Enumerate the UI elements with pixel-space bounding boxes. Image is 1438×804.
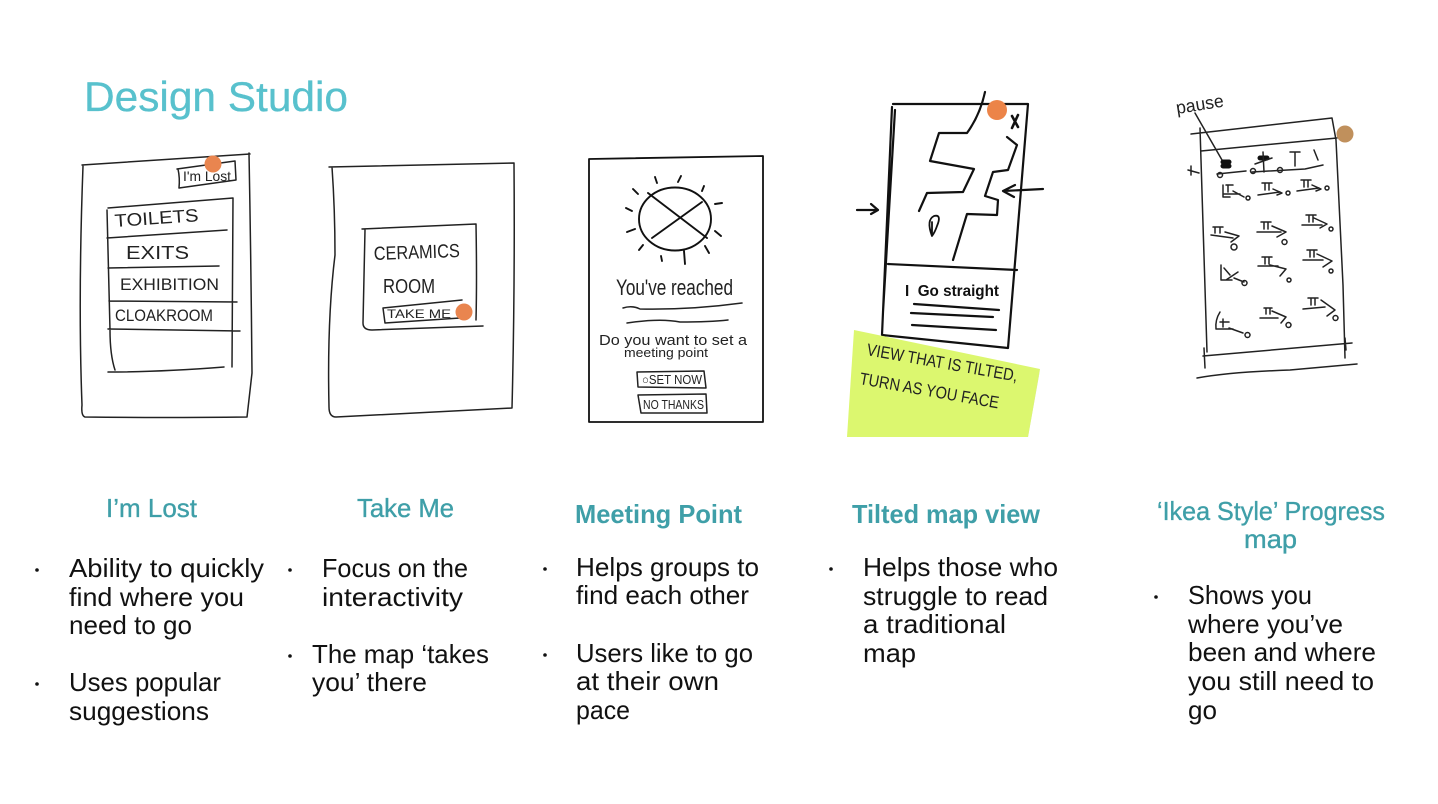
button: I'm Lost — [177, 161, 236, 188]
bullets: Take Me: The map ‘takes — [312, 639, 489, 669]
bullets: Ikea Style Progress map: where you’ve — [1187, 609, 1343, 639]
bullets: Meeting Point: pace — [576, 695, 630, 725]
button: No Thanks — [638, 394, 707, 413]
list: suggestions menu: CLOAKROOM — [115, 306, 213, 325]
bullets: Take Me: you’ there — [312, 667, 427, 697]
sketch: Tilted map view wireframe — [857, 92, 1043, 348]
sketch: Meeting Point wireframe — [589, 156, 763, 422]
bullets: Tilted map view — [829, 552, 1058, 668]
bullets: I'm Lost: Uses popular — [69, 667, 221, 697]
bullets: Ikea Style Progress map: been and where — [1188, 637, 1376, 667]
sticky note — [847, 330, 1040, 437]
text: set a meeting point prompt — [599, 332, 748, 360]
sticky note: VIEW THAT IS TILTED, — [865, 340, 1019, 386]
column: Take Me — [288, 493, 489, 697]
heading: Tilted map view: Tilted map view — [852, 499, 1041, 529]
bullets: Take Me: Focus on the — [322, 553, 468, 583]
card: Ceramics Room — [362, 224, 483, 330]
marker: orange dot — [987, 100, 1007, 120]
bullets: Ikea Style Progress map: you still need to — [1188, 666, 1374, 696]
bullets: Tilted map view: Helps those who — [863, 552, 1058, 582]
bullets: Meeting Point: at their own — [576, 666, 719, 696]
marker: close x — [1012, 115, 1018, 128]
text: You've reached: You've reached — [616, 275, 733, 300]
heading: Meeting Point: Meeting Point — [575, 499, 742, 529]
bullets: Meeting Point — [543, 552, 759, 725]
marker: faded orange dot — [1336, 126, 1354, 142]
map: route lines — [919, 92, 1017, 260]
arrow: left pointer — [857, 204, 878, 214]
sketch: Ikea Style progress wireframe — [1174, 91, 1357, 378]
bullets: Take Me: interactivity — [322, 582, 463, 612]
column: Ikea Style Progress map — [1154, 496, 1385, 725]
bullets: Ikea Style Progress map: Shows you — [1188, 580, 1312, 610]
column: I'm Lost — [35, 493, 264, 726]
bullets: I'm Lost — [35, 553, 264, 726]
marker: orange dot — [204, 156, 222, 172]
button: Set Now: ○SET NOW — [642, 373, 702, 387]
bullets: Ikea Style Progress map — [1154, 580, 1376, 725]
icon: sun with crossed circle — [626, 176, 722, 264]
heading: Take Me: Take Me — [357, 493, 454, 523]
text: Go straight: I Go straight — [905, 283, 1000, 300]
icon: map pin — [929, 216, 939, 236]
list: suggestions menu: TOILETS — [114, 205, 199, 231]
list: suggestions menu — [107, 198, 240, 372]
marker: orange dot — [456, 304, 472, 320]
button: Take Me — [383, 300, 462, 323]
list: suggestions menu: EXHIBITION — [120, 275, 219, 294]
sketch: Take Me wireframe — [329, 163, 514, 417]
card: Ceramics Room: ROOM — [383, 276, 435, 298]
bullets: Tilted map view: struggle to read — [863, 581, 1048, 611]
button: No Thanks: NO THANKS — [643, 398, 704, 412]
sketch: I'm Lost wireframe — [80, 153, 252, 418]
text: pause: pause — [1174, 91, 1225, 118]
sticky note: TURN AS YOU FACE — [858, 369, 1000, 412]
card: Ceramics Room: CERAMICS — [373, 241, 460, 265]
heading: I'm Lost: I’m Lost — [106, 493, 198, 523]
bullets: Meeting Point: Users like to go — [576, 638, 753, 668]
text: set a meeting point prompt: meeting point — [624, 345, 708, 360]
bullets: Meeting Point: Helps groups to — [576, 552, 759, 582]
top row: completed steps — [1217, 150, 1323, 178]
column: Tilted map view — [829, 499, 1058, 668]
bullets: Take Me — [288, 553, 489, 697]
list: suggestions menu: EXITS — [126, 243, 189, 263]
arrow: right pointer — [1003, 185, 1043, 197]
bullets: I'm Lost: suggestions — [69, 696, 209, 726]
button: Take Me: TAKE ME — [387, 307, 451, 321]
bullets: Meeting Point: find each other — [576, 580, 749, 610]
heading: Ikea Style Progress map: map — [1244, 524, 1297, 554]
icons: instruction rows — [1211, 150, 1338, 338]
title: Design Studio — [84, 73, 348, 120]
bullets: I'm Lost: find where you — [69, 582, 244, 612]
text: set a meeting point prompt: Do you want to set a — [599, 332, 748, 349]
bullets: Ikea Style Progress map: go — [1188, 695, 1217, 725]
bullets: I'm Lost: need to go — [69, 610, 192, 640]
bullets: I'm Lost: Ability to quickly — [69, 553, 264, 583]
bullets: Tilted map view: a traditional — [863, 609, 1006, 639]
button: I'm Lost: I'm Lost — [183, 168, 231, 184]
heading: Ikea Style Progress map — [1157, 496, 1385, 554]
column: Meeting Point — [543, 499, 759, 725]
heading: Ikea Style Progress map: ‘Ikea Style’ Progress — [1157, 496, 1385, 526]
bullets: Tilted map view: map — [863, 638, 916, 668]
text: Go straight — [905, 283, 1000, 330]
